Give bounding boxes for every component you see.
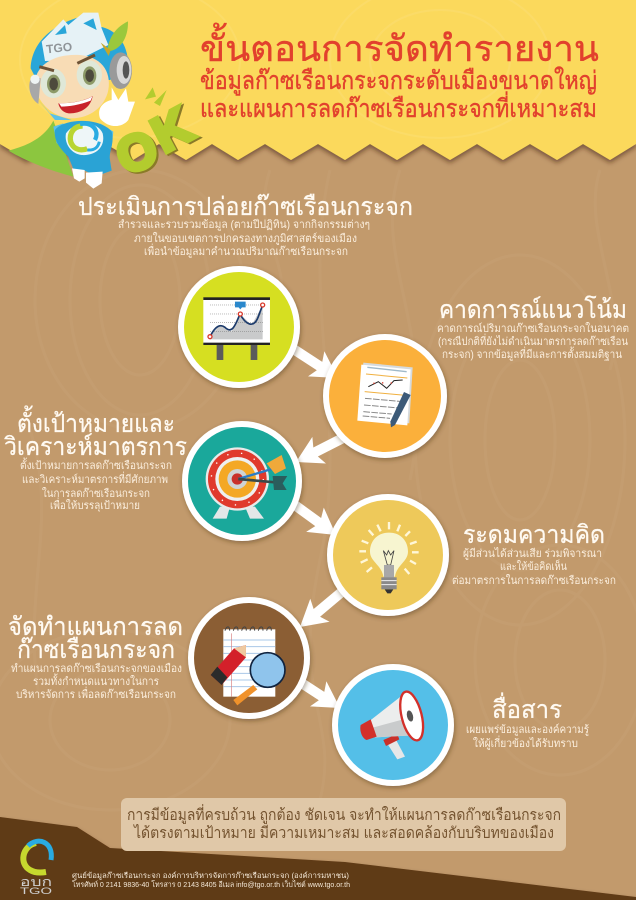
step 5 text: ก๊าซเรือนกระจก bbox=[17, 636, 175, 664]
step 2 circle bbox=[323, 334, 447, 458]
leaf bbox=[107, 21, 128, 52]
step 4 text bbox=[452, 521, 616, 587]
footer text: โทรศัพท์ 0 2141 9836-40 โทรสาร 0 2143 8405 อีเมล info@tgo.or.th เว็บไซต์ www.tgo.or.th bbox=[72, 879, 350, 889]
logo: อบก bbox=[20, 875, 52, 889]
step 3 text: ตั้งเป้าหมายการลดก๊าซเรือนกระจก bbox=[20, 457, 172, 472]
helmet bbox=[31, 13, 128, 80]
OK lettering: O bbox=[111, 121, 167, 187]
arrow 4 to 5 bbox=[290, 577, 356, 638]
OK lettering: K bbox=[145, 98, 203, 164]
icon: report and pen bbox=[357, 363, 413, 427]
logo bbox=[20, 841, 52, 896]
callout bbox=[121, 798, 566, 851]
icon: presentation board chart bbox=[203, 297, 270, 360]
step 6 text bbox=[466, 692, 589, 750]
step 5 circle bbox=[188, 597, 310, 719]
step 3 text: และวิเคราะห์มาตรการที่มีศักยภาพ bbox=[22, 471, 168, 486]
step 3 text: ในการลดก๊าซเรือนกระจก bbox=[42, 487, 150, 500]
step 5 text: รวมทั้งกำหนดแนวทางในการ bbox=[33, 673, 159, 688]
OK lettering bbox=[109, 97, 203, 187]
step 1 text: สำรวจและรวบรวมข้อมูล (ตามปีปฏิทิน) จากกิจกรรมต่างๆ bbox=[118, 218, 370, 231]
step 6 text: ให้ผู้เกี่ยวข้องได้รับทราบ bbox=[473, 735, 578, 750]
step 1 text: ภายในขอบเขตการปกครองทางภูมิศาสตร์ของเมือง bbox=[134, 232, 357, 245]
callout: การมีข้อมูลที่ครบถ้วน ถูกต้อง ชัดเจน จะทำให้แผนการลดก๊าซเรือนกระจก bbox=[127, 804, 561, 825]
face bbox=[35, 55, 109, 118]
step 3 circle bbox=[182, 421, 302, 541]
footer band bbox=[0, 817, 636, 900]
arrow 3 to 4 bbox=[282, 490, 345, 547]
body suit bbox=[55, 121, 113, 176]
step 5 text: จัดทำแผนการลด bbox=[8, 613, 183, 641]
logo: TGO bbox=[20, 886, 52, 896]
step 3 text: เพื่อให้บรรลุเป้าหมาย bbox=[50, 497, 140, 512]
step 4 circle bbox=[327, 494, 449, 616]
hand bbox=[99, 87, 135, 126]
step 3 text: ตั้งเป้าหมายและ bbox=[17, 405, 175, 438]
step 1 text bbox=[78, 193, 413, 258]
step 6 text: สื่อสาร bbox=[492, 692, 562, 724]
cape bbox=[8, 121, 73, 177]
headphones bbox=[109, 52, 132, 89]
icon: target with arrows bbox=[206, 447, 287, 519]
icon: notepad with magnifier and pencil bbox=[211, 627, 285, 705]
step 4 text: ผู้มีส่วนได้ส่วนเสีย ร่วมพิจารณา bbox=[463, 547, 602, 560]
title: ขั้นตอนการจัดทำรายงาน bbox=[200, 22, 599, 69]
step 4 text: และให้ข้อคิดเห็น bbox=[500, 559, 567, 573]
step 5 text bbox=[8, 613, 183, 701]
mascot: TGO bbox=[46, 40, 73, 56]
step 1 text: เพื่อนำข้อมูลมาคำนวณปริมาณก๊าซเรือนกระจก bbox=[144, 243, 348, 258]
step 3 text bbox=[4, 405, 187, 512]
arms bbox=[53, 123, 65, 147]
mascot bbox=[8, 13, 203, 189]
OK lettering: K bbox=[143, 97, 201, 163]
icon: light bulb bbox=[359, 522, 419, 593]
arrow 2 to 3 bbox=[289, 421, 356, 475]
step 3 text: วิเคราะห์มาตรการ bbox=[4, 433, 187, 461]
step 2 text bbox=[437, 295, 629, 361]
OK lettering: O bbox=[109, 119, 165, 185]
footer text: ศูนย์ข้อมูลก๊าซเรือนกระจก องค์การบริหารจัดการก๊าซเรือนกระจก (องค์การมหาชน) bbox=[72, 871, 350, 880]
title bbox=[200, 22, 599, 123]
mouth bbox=[58, 96, 93, 113]
step 1 text: ประเมินการปล่อยก๊าซเรือนกระจก bbox=[78, 193, 413, 221]
step 2 text: กระจก) จากข้อมูลที่มีและการตั้งสมมติฐาน bbox=[442, 346, 622, 361]
yellow header band bbox=[0, 0, 636, 160]
footer text bbox=[72, 871, 350, 889]
step 6 text: เผยแพร่ข้อมูลและองค์ความรู้ bbox=[466, 723, 589, 736]
step 5 text: ทำแผนการลดก๊าซเรือนกระจกของเมือง bbox=[11, 662, 182, 675]
step 6 circle bbox=[332, 664, 454, 786]
callout: ได้ตรงตามเป้าหมาย มีความเหมาะสม และสอดคล้องกับบริบทของเมือง bbox=[132, 824, 554, 842]
step 4 text: ต่อมาตรการในการลดก๊าซเรือนกระจก bbox=[452, 574, 616, 587]
step 1 circle bbox=[178, 266, 300, 388]
collar bbox=[38, 100, 72, 120]
arrow 1 to 2 bbox=[283, 335, 346, 391]
boots bbox=[72, 168, 85, 182]
step 4 text: ระดมความคิด bbox=[463, 521, 605, 549]
step 5 text: บริหารจัดการ เพื่อลดก๊าซเรือนกระจก bbox=[16, 686, 176, 701]
chest logo bbox=[70, 126, 87, 150]
arrow 5 to 6 bbox=[285, 665, 348, 721]
icon: megaphone bbox=[360, 689, 427, 759]
